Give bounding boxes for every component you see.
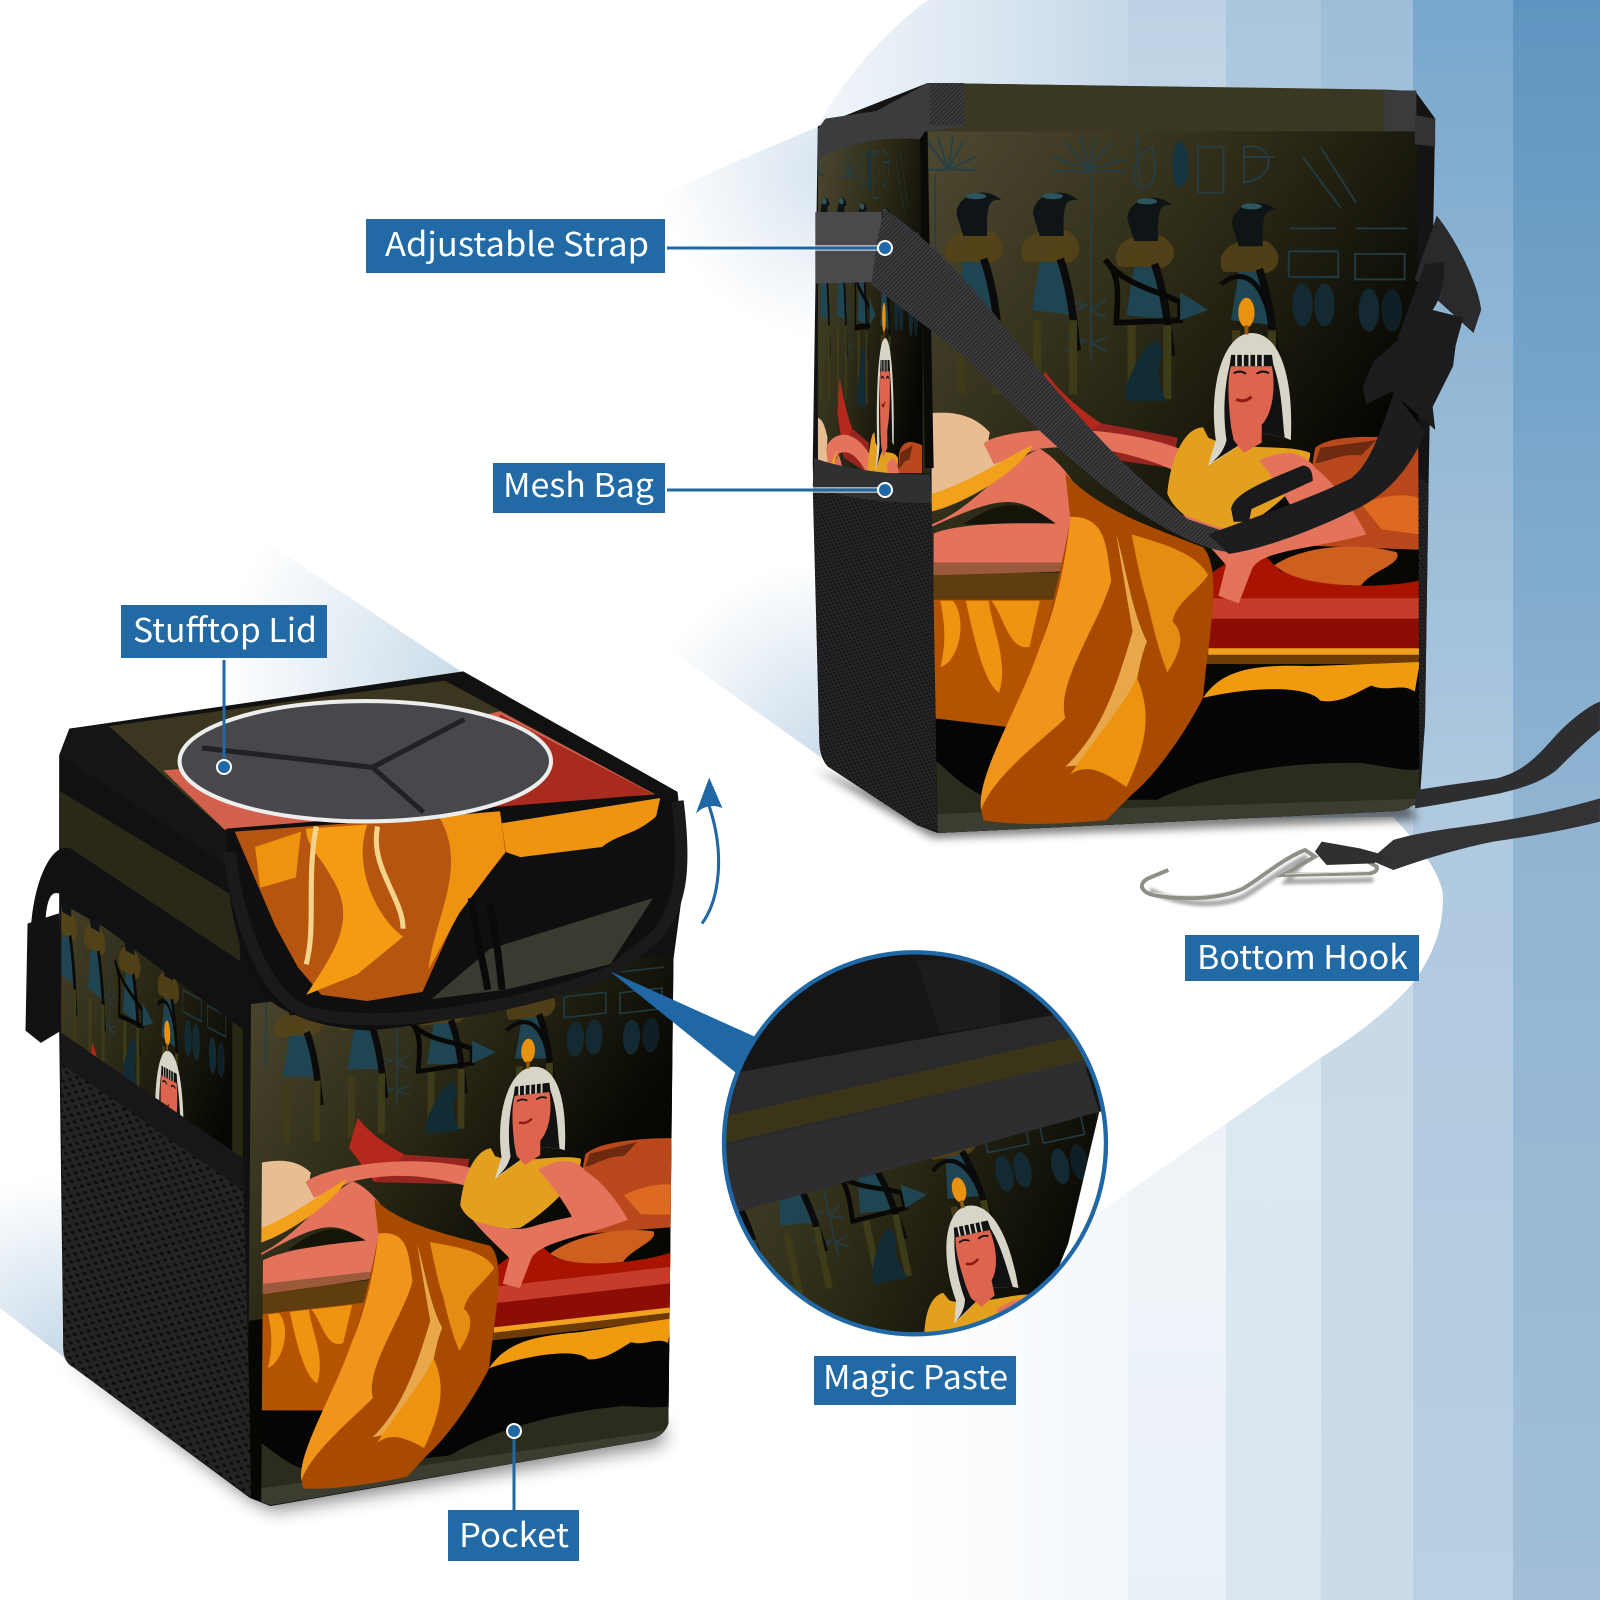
right side mesh <box>1412 473 1429 810</box>
front print <box>248 956 674 1505</box>
background: blue striped swoosh <box>817 0 1600 1600</box>
bag shadow <box>815 769 1417 838</box>
label: Stufftop Lid: Stufftop Lid <box>133 604 317 652</box>
mesh pocket <box>61 1033 252 1498</box>
label: Magic Paste: Magic Paste <box>823 1351 1008 1399</box>
strap slider <box>1231 466 1313 522</box>
lid flap binding <box>230 801 681 1019</box>
circle ring <box>724 952 1106 1334</box>
pointer wedge <box>610 971 757 1073</box>
bag body base <box>59 671 686 1506</box>
leader: adjustable strap <box>667 241 892 255</box>
lid <box>59 681 686 1031</box>
side strap loop <box>815 212 882 283</box>
top binding <box>818 83 1435 159</box>
strap loop and buckle <box>26 848 245 1043</box>
bag shadow <box>63 1357 663 1510</box>
lid flap <box>227 794 686 1031</box>
leader: pocket <box>507 1424 521 1510</box>
side print <box>61 904 243 1158</box>
right bag <box>812 83 1481 846</box>
background: light rays behind bags <box>0 127 830 1362</box>
label: Pocket: Pocket <box>459 1509 569 1557</box>
front print <box>917 126 1422 841</box>
lid side binding <box>59 724 245 878</box>
upper side panel <box>59 791 241 969</box>
left bag <box>26 671 757 1512</box>
label: Mesh Bag: Mesh Bag <box>503 459 654 507</box>
stufftop lid opening <box>180 701 551 821</box>
strap tails <box>1370 702 1600 870</box>
rear flap <box>926 83 1416 131</box>
pull cord <box>471 898 502 990</box>
bottom hook <box>1142 842 1390 903</box>
mesh bag <box>813 458 938 830</box>
label: Bottom Hook: Bottom Hook <box>1197 931 1408 979</box>
lift arrow <box>696 778 722 923</box>
side print <box>818 132 930 474</box>
leader: stufftop lid <box>217 660 231 774</box>
circle contents <box>726 954 1102 1332</box>
side fabric inner edge <box>920 131 934 468</box>
lid top face <box>105 681 656 830</box>
leader: mesh bag <box>667 483 892 497</box>
magnifier circle: magic paste <box>722 950 1108 1336</box>
side buckle <box>1363 262 1463 430</box>
label: Adjustable Strap: Adjustable Strap <box>385 218 649 266</box>
bag body base <box>813 83 1435 833</box>
adjustable strap <box>871 209 1481 554</box>
